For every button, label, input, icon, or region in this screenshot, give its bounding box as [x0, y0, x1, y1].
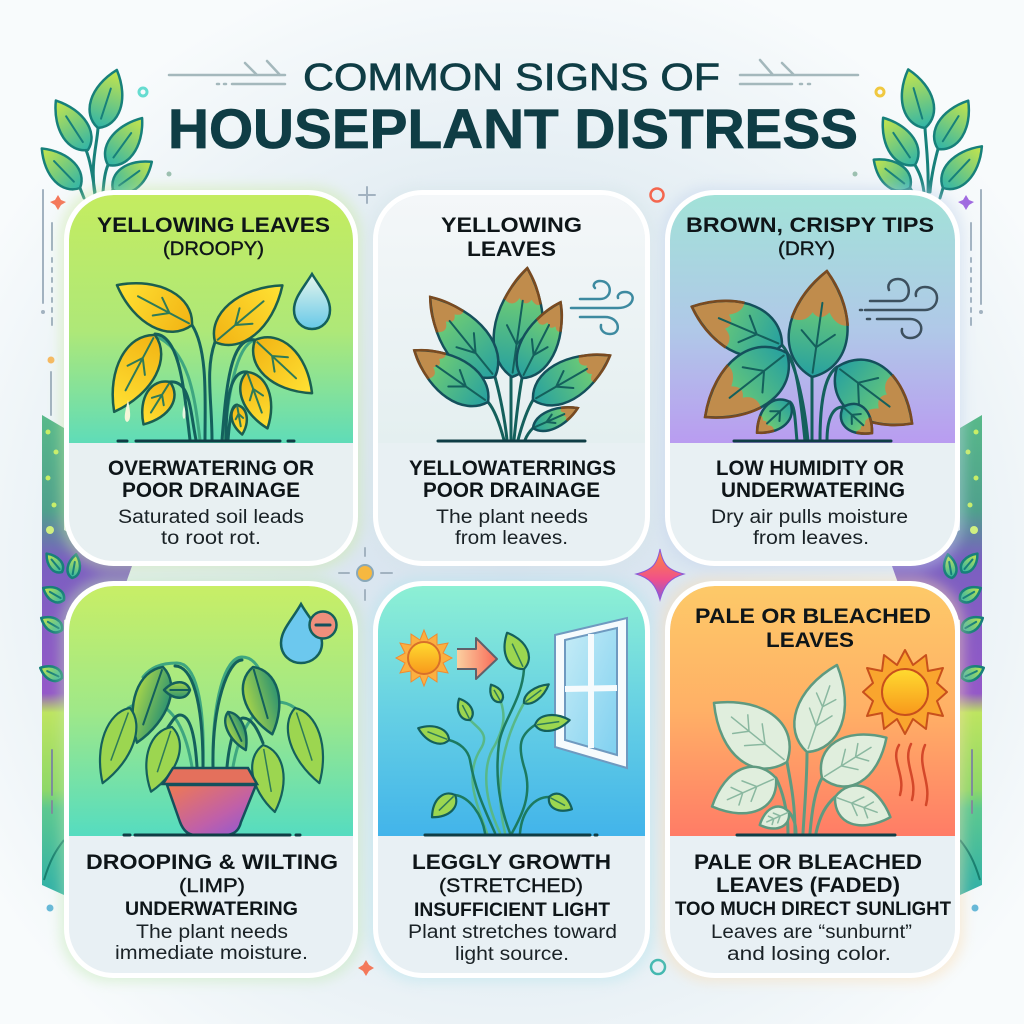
- cause text: [409, 457, 616, 549]
- cause text: [711, 457, 908, 549]
- ground line: [124, 834, 300, 836]
- panel: yellowing leaves brown edged: [376, 192, 648, 564]
- cause text: Dry air pulls moisture: [711, 507, 908, 528]
- right top sprig: [866, 65, 992, 198]
- illustration: wilting plant in pot: [88, 657, 334, 835]
- terracotta pot: [163, 768, 257, 835]
- title decorative rules: [169, 60, 858, 84]
- heading: [441, 214, 582, 261]
- ground line: [737, 834, 895, 836]
- cause text: POOR DRAINAGE: [122, 479, 300, 502]
- icon: water drop with minus: [281, 604, 336, 663]
- cause text: Saturated soil leads: [118, 507, 304, 528]
- heading: BROWN, CRISPY TIPS: [686, 214, 934, 237]
- cause text: Plant stretches toward: [408, 922, 617, 943]
- illustration: leggy plant: [415, 628, 576, 833]
- icon: sun: [396, 630, 452, 686]
- illustration: plant with crispy tips: [682, 267, 929, 446]
- left side decorative strip: [37, 415, 132, 895]
- cause text: LEAVES (FADED): [716, 874, 900, 897]
- right side decorative strip: [892, 415, 987, 895]
- cause text: UNDERWATERING: [125, 899, 298, 920]
- illustration: bleached plant: [696, 657, 899, 835]
- cause text: LEGGLY GROWTH: [412, 851, 611, 874]
- icon: heat waves: [896, 744, 927, 805]
- heading: [97, 214, 330, 260]
- icon: wind: [860, 279, 937, 338]
- cause text: [675, 851, 951, 965]
- cause text: INSUFFICIENT LIGHT: [414, 900, 610, 921]
- ground line: [118, 440, 294, 442]
- cause text: [86, 851, 338, 964]
- illustration: plant with brown tips: [403, 265, 620, 440]
- heading: LEAVES: [467, 238, 556, 261]
- heading: YELLOWING LEAVES: [97, 214, 330, 237]
- panel: drooping and wilting: [66, 584, 356, 976]
- cause text: POOR DRAINAGE: [423, 479, 600, 502]
- cause text: TOO MUCH DIRECT SUNLIGHT: [675, 899, 951, 920]
- cause text: (LIMP): [179, 876, 245, 897]
- cause text: The plant needs: [136, 922, 288, 943]
- ground line: [438, 440, 585, 442]
- cause text: from leaves.: [455, 528, 568, 549]
- cause text: PALE OR BLEACHED: [694, 851, 922, 874]
- illustration: droopy yellow plant: [97, 267, 325, 440]
- icon: water drop: [294, 274, 330, 329]
- heading: [695, 605, 931, 652]
- panel: leggy growth: [376, 584, 648, 976]
- cause text: LOW HUMIDITY OR: [716, 457, 904, 480]
- ground line: [425, 834, 597, 836]
- cause text: to root rot.: [161, 528, 261, 549]
- panel: pale or bleached leaves: [668, 584, 958, 976]
- cause text: DROOPING & WILTING: [86, 851, 338, 874]
- cause text: immediate moisture.: [115, 943, 308, 964]
- title: HOUSEPLANT DISTRESS: [168, 97, 858, 160]
- heading: [686, 214, 934, 260]
- icon: wind: [571, 281, 633, 334]
- cause text: [408, 851, 617, 965]
- cause text: YELLOWATERRINGS: [409, 457, 616, 480]
- heading: (DRY): [778, 239, 835, 260]
- ground line: [734, 440, 891, 442]
- panel: brown crispy tips: [668, 192, 958, 564]
- arrow toward window: [457, 638, 497, 679]
- panel: yellowing leaves droopy: [66, 192, 356, 564]
- cause text: UNDERWATERING: [721, 479, 905, 502]
- cause text: from leaves.: [753, 528, 869, 549]
- cause text: The plant needs: [436, 507, 588, 528]
- cause text: and losing color.: [727, 944, 891, 965]
- heading: LEAVES: [766, 629, 854, 652]
- heading: PALE OR BLEACHED: [695, 605, 931, 628]
- heading: YELLOWING: [441, 214, 582, 237]
- title: COMMON SIGNS OF: [303, 57, 720, 99]
- left top sprig: [32, 65, 159, 200]
- heading: (DROOPY): [163, 239, 264, 260]
- icon: window: [555, 618, 627, 768]
- cause text: OVERWATERING OR: [108, 457, 314, 480]
- icon: sun: [863, 650, 947, 734]
- title: [168, 57, 858, 160]
- card glows: [60, 186, 964, 982]
- cause text: light source.: [455, 944, 569, 965]
- cause text: (STRETCHED): [439, 876, 583, 897]
- cause text: [108, 457, 314, 549]
- decorative side lines and sparkles: [41, 88, 983, 976]
- cause text: Leaves are “sunburnt”: [711, 922, 912, 943]
